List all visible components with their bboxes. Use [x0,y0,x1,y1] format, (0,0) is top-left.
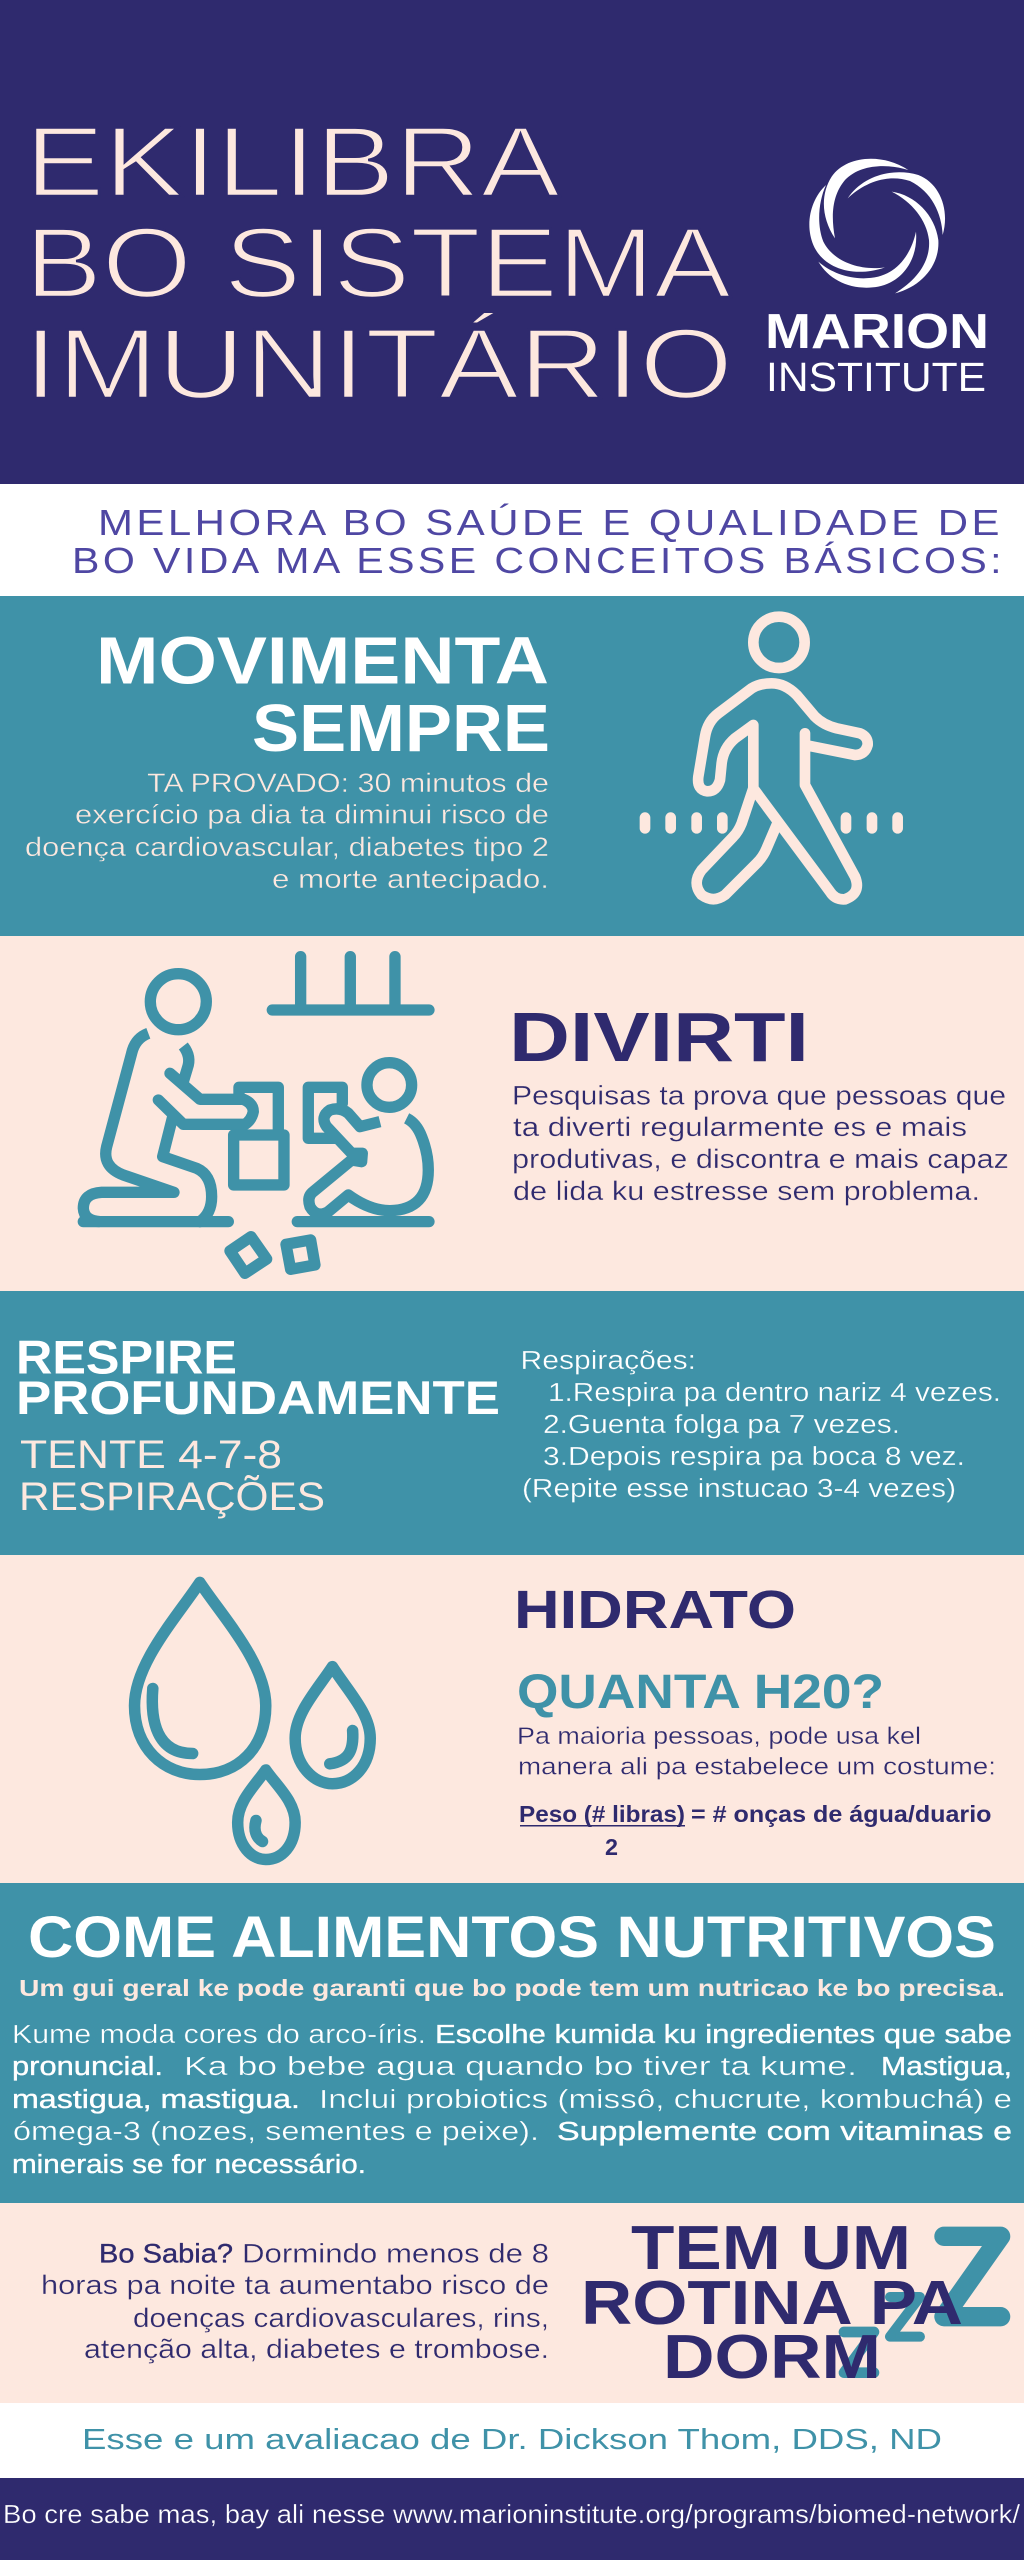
heading: come alimentos nutritivos: COME ALIMENTOS NUTRITIVOS [28,1905,996,1970]
text block: nutrition advice: Ka bo bebe agua quando bo tiver ta kume. [184,2053,857,2081]
subheading: tente 4-7-8 [19,1433,325,1519]
text block: bo sabia: Dormindo menos de 8 [242,2238,549,2268]
panel: credit [0,2403,1024,2478]
formula [519,1801,992,1860]
logo: Marion Institute [765,159,989,400]
heading: hidrato: HIDRATO [514,1580,796,1640]
logo wordmark: INSTITUTE [766,354,986,400]
text block: bo sabia [41,2238,549,2364]
panel: come alimentos nutritivos [0,1883,1024,2203]
text block: bo sabia: doenças cardiovasculares, rins, [133,2303,549,2333]
text block: nutrition advice [12,2021,1012,2179]
text block: ta provado: exercício pa dia ta diminui risco de [75,800,549,830]
text block: ta provado: TA PROVADO: 30 minutos de [147,768,549,798]
subheading: um gui geral: Um gui geral ke pode garanti que bo pode tem um nutricao ke bo precisa. [19,1975,1005,2001]
text block: bo sabia: atenção alta, diabetes e trombose. [84,2334,549,2364]
title [24,106,733,419]
text block: hidrato: manera ali pa estabelece um costume: [518,1754,996,1780]
subheading: tente 4-7-8: TENTE 4-7-8 [20,1433,282,1477]
heading: movimenta sempre [96,624,550,766]
text block: nutrition advice: ómega-3 (nozes, sementes e peixe). [13,2118,539,2146]
logo wordmark [765,305,989,400]
logo wordmark: MARION [765,305,989,359]
heading: tem um rotina pa dorm: DORM [663,2323,881,2392]
text block: breathing steps: Respirações: [520,1347,696,1375]
text block: divirti [512,1080,1009,1206]
heading: respire profundamente [16,1330,500,1424]
text block: divirti: produtivas, e discontra e mais capaz [512,1144,1009,1174]
subtitle text: MELHORA BO SAÚDE E QUALIDADE DE [98,502,1003,543]
panel: respire profundamente [0,1291,1024,1555]
subtitle text [72,502,1005,581]
text block: breathing steps: (Repite esse instucao 3-4 vezes) [522,1475,956,1503]
title: EKILIBRA [25,106,560,217]
text block: nutrition advice: Inclui probiotics (missô, chucrute, kombuchá) e [319,2086,1012,2114]
text block: nutrition advice: pronuncial. [12,2053,163,2081]
title: IMUNITÁRIO [24,308,733,419]
heading: tem um rotina pa dorm: ROTINA PA [581,2269,963,2338]
icon: water drops [135,1582,370,1860]
text block: breathing steps [520,1347,1001,1503]
text block: divirti: Pesquisas ta prova que pessoas que [512,1080,1006,1110]
text block: bo sabia: Bo Sabia? [99,2238,233,2268]
text block: nutrition advice: Kume moda cores do arco-íris. [12,2021,426,2049]
icon: adult and child playing with blocks [83,957,429,1273]
text block: nutrition advice: Supplemente com vitaminas e [557,2118,1012,2146]
formula: 2 [605,1834,618,1860]
panel: divirti [0,936,1024,1291]
text block: divirti: ta diverti regularmente es e mais [513,1112,967,1142]
heading: quanta h20: QUANTA H20? [517,1666,884,1719]
panel: header [0,0,1024,484]
text block: divirti: de lida ku estresse sem problema. [513,1176,980,1206]
icon: sleep z letters [844,2236,1001,2373]
text: footer link: Bo cre sabe mas, bay ali nesse www.marioninstitute.org/programs/biomed-network/ [3,2499,1021,2529]
panel: movimenta sempre [0,596,1024,936]
heading: movimenta sempre: MOVIMENTA [96,624,549,698]
text block: breathing steps: 1.Respira pa dentro nariz 4 vezes. [548,1379,1001,1407]
text block: nutrition advice: minerais se for necessário. [12,2151,366,2179]
heading: tem um rotina pa dorm: TEM UM [631,2214,911,2283]
heading: respire profundamente: RESPIRE [16,1330,237,1384]
heading: divirti: DIVIRTI [509,998,809,1076]
subtitle text: BO VIDA MA ESSE CONCEITOS BÁSICOS: [72,540,1005,581]
panel: hidrato [0,1555,1024,1883]
formula: Peso (# libras) [519,1801,685,1827]
formula: = # onças de água/duario [691,1801,992,1827]
text block: hidrato [517,1723,996,1780]
text block: nutrition advice: mastigua, mastigua. [12,2086,300,2114]
icon: walking person [645,617,898,899]
title: BO SISTEMA [25,207,731,318]
text block: ta provado: e morte antecipado. [272,864,549,894]
heading: movimenta sempre: SEMPRE [252,691,550,766]
icon: swirl [809,159,945,293]
panel: footer [0,2478,1024,2560]
heading: tem um rotina pa dorm [581,2214,963,2392]
text block: ta provado [25,768,549,894]
text block: breathing steps: 3.Depois respira pa boca 8 vez. [543,1443,965,1471]
heading: respire profundamente: PROFUNDAMENTE [16,1371,500,1424]
text block: ta provado: doença cardiovascular, diabetes tipo 2 [25,832,549,862]
text block: bo sabia: horas pa noite ta aumentabo risco de [41,2270,549,2300]
text block: nutrition advice: Escolhe kumida ku ingredientes que sabe [435,2021,1012,2049]
panel: sono [0,2203,1024,2403]
text block: hidrato: Pa maioria pessoas, pode usa kel [517,1723,921,1750]
panel: subtitle [0,484,1024,596]
subheading: tente 4-7-8: RESPIRAÇÕES [19,1475,325,1519]
text: credit: Esse e um avaliacao de Dr. Dickson Thom, DDS, ND [82,2424,942,2456]
text block: breathing steps: 2.Guenta folga pa 7 vezes. [543,1411,900,1439]
text block: nutrition advice: Mastigua, [881,2053,1012,2081]
